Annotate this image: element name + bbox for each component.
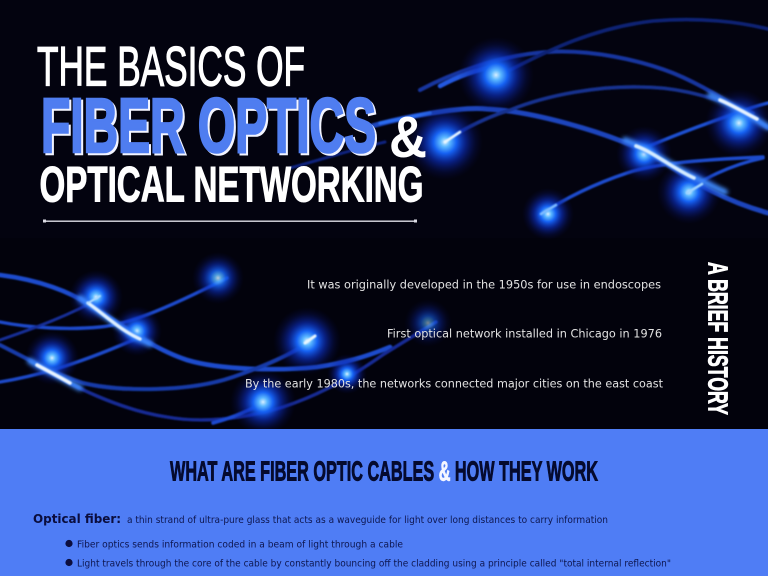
title line: fiber optics: FIBER OPTICS — [43, 85, 378, 171]
definition term: Optical fiber: — [33, 512, 121, 526]
title divider — [43, 220, 417, 222]
bullet list — [65, 540, 671, 570]
fiber strands: lower left — [0, 275, 436, 423]
title — [37, 35, 427, 212]
panel: title background — [0, 0, 768, 238]
vertical heading: a brief history: A BRIEF HISTORY — [702, 262, 734, 415]
history item: 1980s: By the early 1980s, the networks connected major cities on the east coast — [245, 376, 663, 390]
history item: 1950s: It was originally developed in the 1950s for use in endoscopes — [307, 278, 661, 292]
title ampersand: & — [389, 105, 427, 170]
history item: 1976: First optical network installed in Chicago in 1976 — [387, 326, 662, 340]
title line: the basics of: THE BASICS OF — [37, 35, 305, 98]
fiber highlights: top right — [445, 95, 768, 214]
title line: fiber optics — [41, 83, 378, 171]
section heading: WHAT ARE FIBER OPTIC CABLES & HOW THEY WORK — [170, 456, 598, 486]
panel: brief history background — [0, 238, 768, 429]
definition: optical fiber — [33, 512, 608, 526]
glow: lower left nodes — [25, 252, 452, 435]
title line: optical networking: OPTICAL NETWORKING — [40, 156, 424, 212]
bullet 1: Fiber optics sends information coded in a beam of light through a cable — [77, 540, 403, 550]
definition text: a thin strand of ultra-pure glass that acts as a waveguide for light over long distances to carry information — [127, 515, 608, 526]
title line: fiber optics: FIBER OPTICS — [41, 83, 376, 169]
bullet 2: Light travels through the core of the cable by constantly bouncing off the cladding using a principle called "total internal reflection" — [77, 558, 671, 570]
fiber highlights: lower left — [30, 296, 315, 388]
fiber strands: top right — [290, 20, 768, 215]
panel: what are fiber optic cables — [0, 429, 768, 576]
history list — [245, 278, 663, 390]
glow: top right nodes — [407, 37, 768, 240]
